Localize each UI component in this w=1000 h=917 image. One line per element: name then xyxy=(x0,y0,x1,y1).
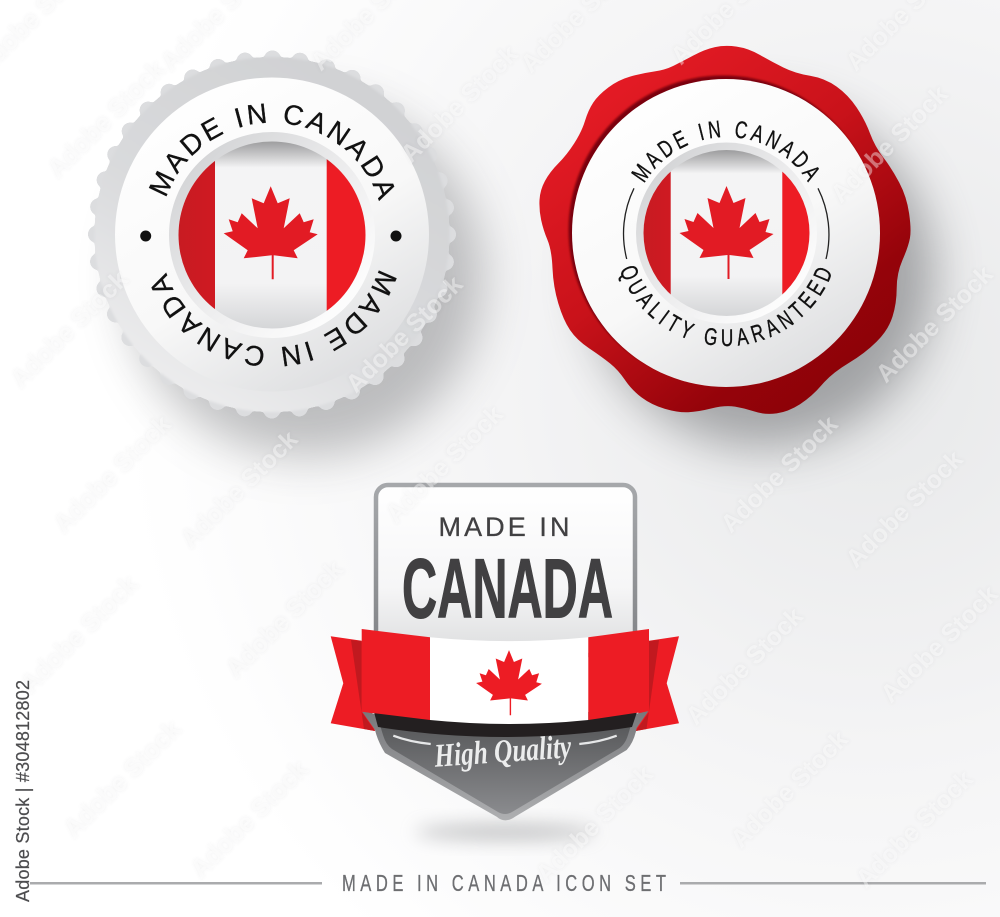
left rule xyxy=(30,882,322,884)
watermarks: Adobe Stock xyxy=(48,410,176,538)
lower steel shield rim xyxy=(362,711,648,820)
curved text top: N xyxy=(761,126,784,155)
curved text top xyxy=(627,116,825,187)
ground shadow xyxy=(415,824,595,840)
curved text bottom: R xyxy=(748,319,768,348)
curved text top: C xyxy=(733,117,749,145)
left dot xyxy=(140,230,151,242)
watermarks: Adobe Stock xyxy=(380,400,508,528)
badge: silver bottle-cap seal xyxy=(88,50,506,480)
black band xyxy=(374,712,637,737)
right ribbon tail xyxy=(636,636,679,731)
caption text: MADE IN CANADA ICON SET xyxy=(342,871,666,897)
scalloped silver edge xyxy=(94,57,450,412)
seal shadow xyxy=(590,103,934,447)
watermarks: Adobe Stock xyxy=(680,602,808,730)
curved text bottom: I xyxy=(654,306,674,330)
curved text bottom: U xyxy=(622,275,651,300)
curved text top: I xyxy=(696,119,707,146)
line left xyxy=(393,736,431,744)
watermarks: Adobe Stock xyxy=(840,445,968,573)
curved text bottom: MADE IN CANADA xyxy=(151,270,397,366)
curved text top: A xyxy=(797,161,825,186)
badge: shield with ribbon xyxy=(331,485,679,840)
flag ring xyxy=(636,142,817,324)
watermarks: Adobe Stock xyxy=(530,760,658,888)
curved text bottom xyxy=(614,262,838,352)
watermarks: Adobe Stock xyxy=(340,270,468,398)
curved text top: A xyxy=(640,146,667,173)
curved text bottom: A xyxy=(631,287,659,313)
disc shadow xyxy=(568,76,878,384)
curved text top: D xyxy=(786,147,814,174)
curved text top: A xyxy=(775,135,800,163)
curved text top: A xyxy=(748,120,767,149)
curved text bottom: U xyxy=(721,325,733,352)
watermarks: Adobe Stock xyxy=(875,580,1000,708)
watermarks: Adobe Stock xyxy=(850,765,978,893)
upper panel xyxy=(376,485,635,655)
wavy red edge xyxy=(539,46,911,414)
curved text bottom: T xyxy=(662,310,685,338)
icon: maple leaf xyxy=(680,186,774,279)
icon: maple leaf xyxy=(224,186,318,279)
right dot xyxy=(390,230,402,242)
curved text bottom: E xyxy=(802,276,831,300)
script text: High Quality xyxy=(432,729,573,775)
white disc xyxy=(572,79,880,387)
badge shadow xyxy=(127,100,483,456)
line right xyxy=(579,736,617,744)
curved text bottom: A xyxy=(735,323,750,351)
curved text bottom: L xyxy=(643,298,668,324)
watermarks: Adobe Stock xyxy=(42,55,170,183)
left thin arc xyxy=(624,188,634,259)
white inner disc xyxy=(115,78,429,392)
round Canadian flag xyxy=(643,150,811,318)
heading: made in: MADE IN xyxy=(438,512,570,542)
left ribbon tail xyxy=(331,636,375,731)
curved text bottom: E xyxy=(794,288,821,313)
right thin arc xyxy=(818,188,829,259)
watermarks: Adobe Stock xyxy=(58,715,186,843)
curved text top: D xyxy=(653,135,679,163)
curved text top: M xyxy=(627,160,657,187)
icon: maple leaf xyxy=(476,650,542,715)
curved text bottom: G xyxy=(702,323,719,351)
watermarks: Adobe Stock xyxy=(725,725,853,853)
ribbon left red xyxy=(362,629,430,720)
right rule xyxy=(680,882,986,884)
round Canadian flag xyxy=(178,141,369,331)
ribbon white centre xyxy=(430,637,588,724)
curved text bottom: D xyxy=(809,263,838,285)
heading: canada: CANADA xyxy=(402,542,613,636)
curved text top: E xyxy=(669,126,692,155)
watermarks: Adobe Stock xyxy=(220,555,348,683)
curved text top: N xyxy=(707,116,722,144)
curved text bottom: Y xyxy=(676,316,697,345)
badge: red wax seal xyxy=(539,46,934,447)
flag ring xyxy=(169,132,375,338)
stock id text: Adobe Stock | #304812802 xyxy=(13,680,33,902)
watermarks: Adobe Stock xyxy=(5,265,133,393)
curved text bottom: A xyxy=(761,314,783,343)
curved text bottom: N xyxy=(773,306,798,335)
curved text top: MADE IN CANADA xyxy=(148,103,394,202)
curved text bottom: T xyxy=(785,298,810,324)
watermarks: Adobe Stock xyxy=(15,570,143,698)
watermarks: Adobe Stock xyxy=(395,40,523,168)
watermarks: Adobe Stock xyxy=(825,80,953,208)
watermarks: Adobe Stock xyxy=(715,410,843,538)
watermarks: Adobe Stock xyxy=(870,260,998,388)
lower steel shield xyxy=(380,725,631,814)
watermarks: Adobe Stock xyxy=(175,425,303,553)
curved text bottom: Q xyxy=(614,262,644,284)
watermarks: Adobe Stock xyxy=(185,755,313,883)
ribbon right red xyxy=(588,629,649,720)
